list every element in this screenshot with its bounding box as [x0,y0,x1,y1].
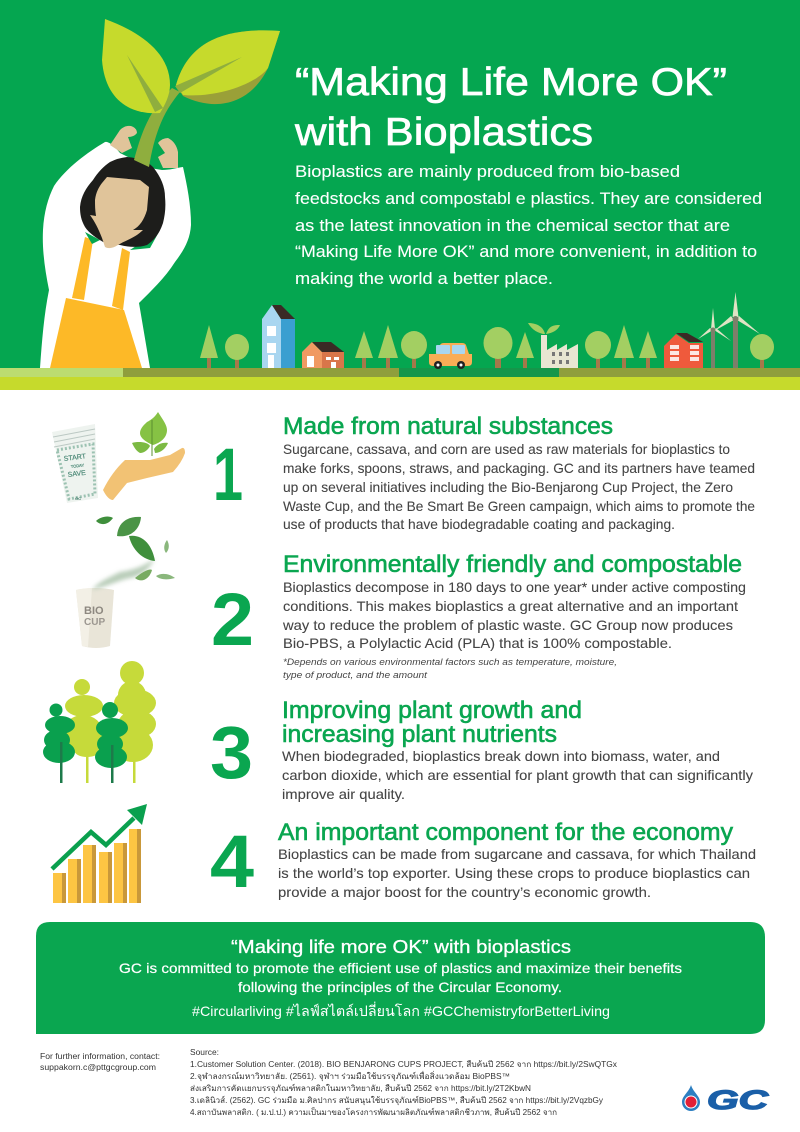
body text 3 [282,748,753,802]
body text 4: is the world’s top exporter. Using these crops to produce bioplastics can [278,865,750,881]
illustration: town skyline [200,292,774,369]
banner text [119,960,682,995]
icon: cup and hand with plant: TODAY [71,462,85,469]
panel: closing banner [36,922,765,1034]
icon: red building [664,333,703,368]
footnote: type of product, and the amount [283,670,427,681]
body text 2: way to reduce the problem of plastic waste. GC Group now produces [282,617,733,633]
body text 1 [283,441,755,532]
number 2: 2 [211,578,254,661]
body text 2 [282,579,746,651]
panel: hero header [0,0,800,390]
banner text: GC is committed to promote the efficient use of plastics and maximize their benefits [119,960,682,976]
sources: 4.สถาบันพลาสติก. ( ม.ป.ป.) ความเป็นมาของโครงการพัฒนาผลิตภัณฑ์พลาสติกชีวภาพ, สืบค้นปี 2562 จาก [190,1107,557,1117]
heading 2: Environmentally friendly and compostable [283,551,742,578]
heading 3: Improving plant growth and [282,697,582,724]
icon: trees [43,661,156,783]
icon: bio cup with swirling leaves [76,517,175,648]
section 4: economy [52,804,756,903]
title: “Making Life More OK” [295,61,727,104]
body text 3: When biodegraded, bioplastics break down into biomass, water, and [282,748,720,764]
body text 4: provide a major boost for the country’s economic growth. [278,884,651,900]
sources [190,1048,617,1117]
body text 2: Bio-PBS, a Polylactic Acid (PLA) that is 100% compostable. [283,635,672,651]
intro text [295,162,762,288]
icon: cup and hand with plant: START [63,453,87,463]
footnote [283,657,617,681]
icon: green factory [528,323,578,368]
illustration: person holding sprout [40,19,280,368]
title: with Bioplastics [294,111,593,154]
body text 1: Waste Cup, and the Be Smart Be Green campaign, which aims to promote the [283,498,755,514]
heading 3 [282,697,582,748]
banner heading: “Making life more OK” with bioplastics [231,936,571,957]
bar chart icon with rising arrow [52,804,147,903]
body text 1: use of products that have biodegradable coating and packaging. [283,516,675,532]
heading 1: Made from natural substances [283,413,613,440]
icon: orange house [302,342,344,368]
sources: 3.เดลินิวส์. (2562). GC ร่วมมือ ม.ศิลปากร สนับสนุนใช้บรรจุภัณฑ์BioPBS™, สืบค้นปี 2562 จาก https://bit.ly/2VqzbGy [190,1095,603,1105]
icon: cup and hand with plant: GC [75,496,81,501]
intro text: as the latest innovation in the chemical sector that are [295,216,730,235]
section 3: plant growth [43,661,753,802]
body text 1: Sugarcane, cassava, and corn are used as raw materials for bioplastics to [283,441,730,457]
number 4: 4 [210,820,254,903]
intro text: “Making Life More OK” and more convenient, in addition to [295,242,757,261]
sources: Source: [190,1048,219,1057]
icon: bio cup with swirling leaves: BIO [84,605,104,617]
icon: blue tower [262,305,295,368]
heading 3: increasing plant nutrients [282,721,557,748]
icon: car [429,343,472,369]
body text 2: Bioplastics decompose in 180 days to one year* under active composting [283,579,746,595]
icon: wind turbines [698,292,760,368]
body text 3: carbon dioxide, which are essential for plant growth that can significantly [282,767,753,783]
intro text: feedstocks and compostabl e plastics. They are considered [295,189,762,208]
body text 2: conditions. This makes bioplastics a great alternative and an important [283,598,738,614]
section 1: natural substances [52,412,755,532]
contact details: suppakorn.c@pttgcgroup.com [40,1063,156,1072]
body text 3: improve air quality. [282,786,405,802]
intro text: Bioplastics are mainly produced from bio-based [295,162,680,181]
sources: 2.จุฬาลงกรณ์มหาวิทยาลัย. (2561). จุฬาฯ ร่วมมือใช้บรรจุภัณฑ์เพื่อสิ่งแวดล้อม BioPBS™ [190,1070,510,1081]
number 1: 1 [213,433,243,516]
hashtags: #Circularliving #ไลฟ์สไตล์เปลี่ยนโลก #GCChemistryforBetterLiving [192,1002,610,1019]
sources: ส่งเสริมการคัดแยกบรรจุภัณฑ์พลาสติกในมหาวิทยาลัย, สืบค้นปี 2562 จาก https://bit.ly/2T2KbwN [190,1083,531,1093]
body text 1: up on several initiatives including the Bio-Benjarong Cup Project, the Zero [283,479,733,495]
logo: GC [682,1085,769,1115]
body text 1: make forks, spoons, straws, and packaging. GC and its partners have teamed [283,460,755,476]
intro text: making the world a better place. [295,269,553,288]
banner text: following the principles of the Circular Economy. [238,979,562,995]
contact details: For further information, contact: [40,1052,160,1061]
section 2: compostable [76,517,746,681]
sources: 1.Customer Solution Center. (2018). BIO BENJARONG CUPS PROJECT, สืบค้นปี 2562 จาก https://bit.ly/2SwQTGx [190,1060,617,1069]
heading 4: An important component for the economy [278,819,733,846]
contact details [40,1052,160,1072]
footnote: *Depends on various environmental factors such as temperature, moisture, [283,657,617,668]
icon: cup and hand with plant: SAVE [67,470,87,479]
body text 4 [278,846,756,900]
icon: bio cup with swirling leaves: CUP [84,617,105,628]
title [294,61,727,154]
icon: cup and hand with plant [52,412,185,503]
body text 4: Bioplastics can be made from sugarcane and cassava, for which Thailand [278,846,756,862]
number 3: 3 [210,711,253,794]
logo: GC: GC [707,1085,769,1115]
